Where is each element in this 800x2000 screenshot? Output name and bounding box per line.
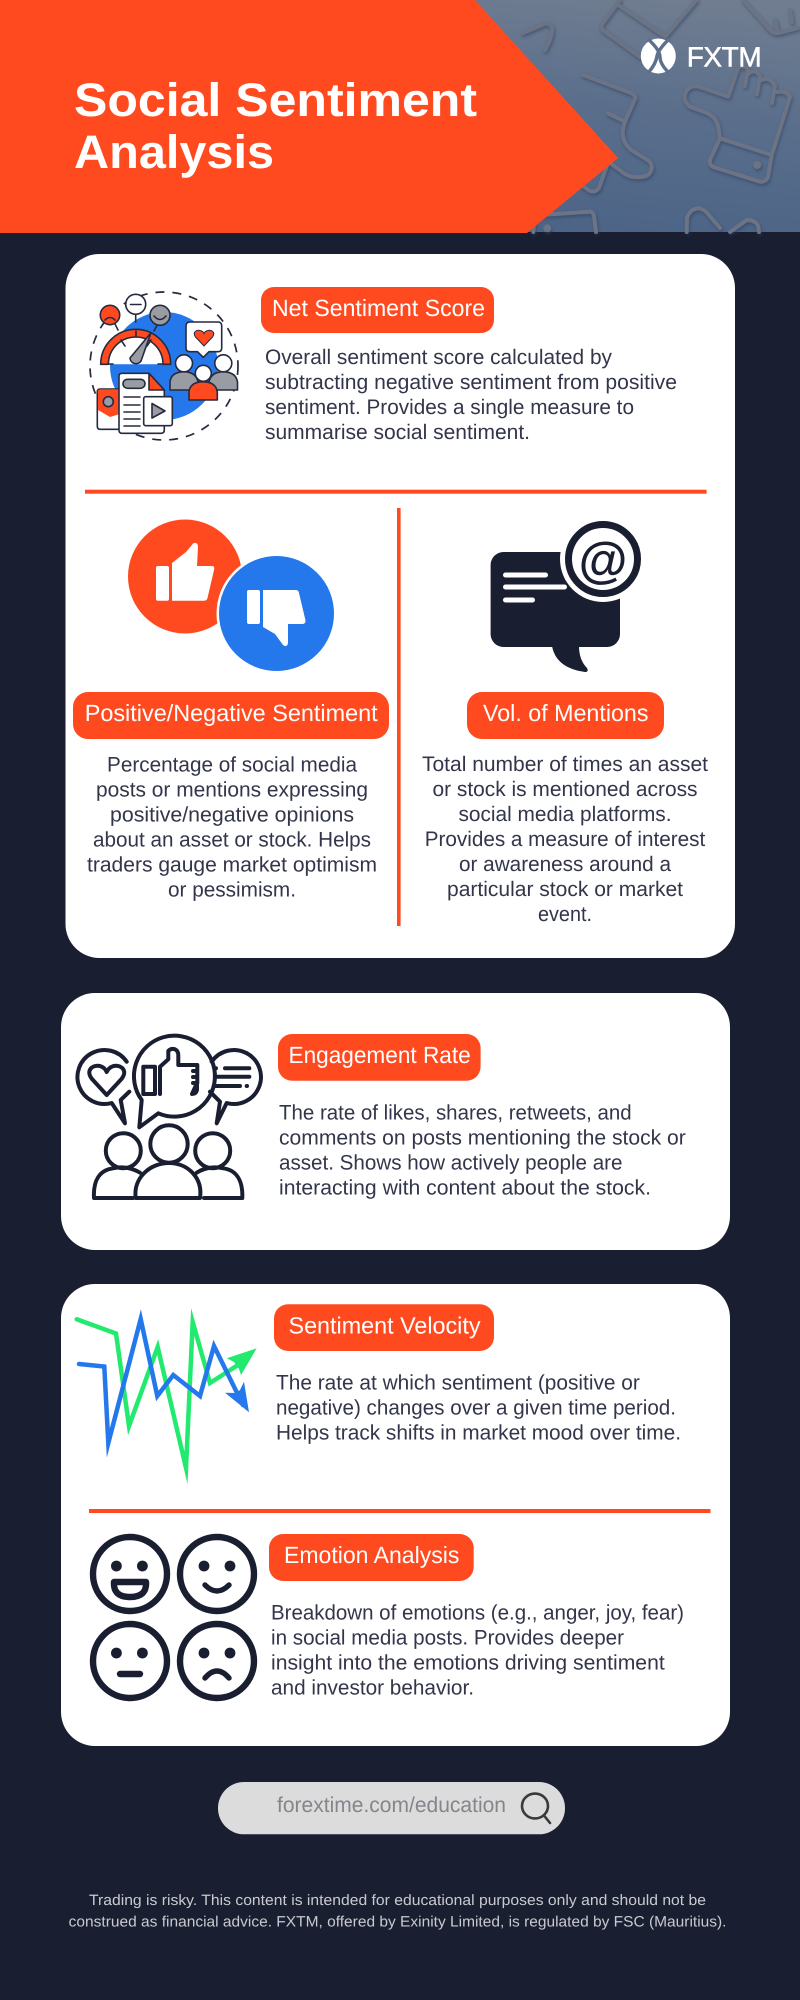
heading: net sentiment score bbox=[261, 287, 494, 333]
title bbox=[74, 73, 477, 178]
sad face bbox=[180, 1624, 254, 1698]
icon: people with speech bubbles bbox=[77, 1036, 261, 1198]
heading: positive/negative sentiment bbox=[73, 692, 389, 739]
text: mentions description: or stock is mentioned across bbox=[432, 778, 698, 801]
heading: engagement rate bbox=[278, 1034, 481, 1081]
text: positive/negative description bbox=[87, 754, 377, 902]
heading: sentiment velocity: Sentiment Velocity bbox=[288, 1312, 481, 1338]
panel: net sentiment, positive/negative, mentions bbox=[66, 254, 735, 958]
text: engagement description bbox=[279, 1101, 686, 1199]
text: net sentiment description: subtracting negative sentiment from positive bbox=[265, 371, 677, 394]
text: engagement description: interacting with content about the stock. bbox=[279, 1176, 651, 1199]
icon: emotion faces bbox=[93, 1537, 254, 1698]
text: mentions description: Total number of times an asset bbox=[422, 753, 708, 776]
neutral face bbox=[93, 1624, 167, 1698]
icon: sentiment gauge and people bbox=[90, 292, 238, 440]
text: emotion description: Breakdown of emotions (e.g., anger, joy, fear) bbox=[271, 1601, 684, 1624]
text: net sentiment description: sentiment. Provides a single measure to bbox=[265, 396, 634, 419]
text: emotion description: in social media posts. Provides deeper bbox=[271, 1626, 624, 1649]
search bar: forextime link: forextime.com/education bbox=[277, 1793, 506, 1817]
happy face bbox=[93, 1537, 167, 1611]
FXTM logo bbox=[641, 38, 762, 74]
icon: chat bubble with at sign: @ bbox=[579, 532, 627, 588]
text: velocity description: negative) changes over a given time period. bbox=[276, 1396, 676, 1419]
icon: chat bubble with at sign bbox=[491, 516, 646, 672]
panel: engagement rate bbox=[61, 993, 730, 1250]
header photo background with hand outlines bbox=[440, 0, 800, 232]
text: mentions description: social media platforms. bbox=[458, 803, 672, 826]
smiling face bbox=[180, 1537, 254, 1611]
text: emotion description: insight into the emotions driving sentiment bbox=[271, 1651, 665, 1674]
text: positive/negative description: Percentage of social media bbox=[107, 754, 357, 777]
disclaimer text: Trading is risky. This content is intended for educational purposes only and should not be bbox=[89, 1892, 706, 1909]
icon: velocity line chart bbox=[77, 1319, 257, 1468]
search bar: forextime link bbox=[218, 1782, 565, 1834]
heading: positive/negative sentiment: Positive/Negative Sentiment bbox=[85, 700, 378, 726]
disclaimer text: construed as financial advice. FXTM, offered by Exinity Limited, is regulated by FSC (Mauritius). bbox=[69, 1914, 726, 1931]
text: emotion description: and investor behavior. bbox=[271, 1676, 474, 1699]
text: velocity description bbox=[276, 1371, 681, 1444]
orange chevron bbox=[0, 0, 618, 233]
text: positive/negative description: traders gauge market optimism bbox=[87, 854, 377, 877]
text: mentions description: particular stock or market bbox=[447, 878, 683, 901]
text: positive/negative description: posts or mentions expressing bbox=[96, 779, 368, 802]
text: net sentiment description bbox=[265, 346, 677, 444]
icon: magnifying glass bbox=[522, 1794, 550, 1823]
disclaimer text bbox=[69, 1892, 726, 1931]
heading: net sentiment score: Net Sentiment Score bbox=[272, 295, 485, 321]
panel: sentiment velocity and emotion analysis bbox=[61, 1284, 730, 1746]
text: mentions description bbox=[422, 753, 708, 926]
text: velocity description: The rate at which sentiment (positive or bbox=[276, 1371, 640, 1394]
text: net sentiment description: summarise social sentiment. bbox=[265, 421, 530, 444]
text: positive/negative description: positive/negative opinions bbox=[110, 804, 354, 827]
green trend line bbox=[77, 1319, 257, 1468]
FXTM logo: FXTM bbox=[687, 42, 762, 72]
text: engagement description: The rate of likes, shares, retweets, and bbox=[279, 1101, 632, 1124]
heading: vol. of mentions: Vol. of Mentions bbox=[483, 700, 648, 726]
text: engagement description: asset. Shows how actively people are bbox=[279, 1151, 622, 1174]
blue trend line bbox=[79, 1319, 249, 1443]
heading: emotion analysis bbox=[269, 1534, 474, 1581]
text: velocity description: Helps track shifts in market mood over time. bbox=[276, 1421, 681, 1444]
title: Analysis bbox=[74, 125, 274, 178]
text: net sentiment description: Overall sentiment score calculated by bbox=[265, 346, 612, 369]
heading: sentiment velocity bbox=[274, 1304, 494, 1351]
icon: thumbs up and down bbox=[128, 520, 336, 674]
heading: engagement rate: Engagement Rate bbox=[288, 1042, 471, 1068]
text: positive/negative description: or pessimism. bbox=[168, 879, 296, 902]
text: mentions description: or awareness around a bbox=[459, 853, 671, 876]
text: engagement description: comments on posts mentioning the stock or bbox=[279, 1126, 686, 1149]
text: mentions description: Provides a measure of interest bbox=[425, 828, 705, 851]
text: positive/negative description: about an asset or stock. Helps bbox=[93, 829, 371, 852]
heading: emotion analysis: Emotion Analysis bbox=[284, 1542, 459, 1568]
title: Social Sentiment bbox=[74, 73, 477, 126]
text: emotion description bbox=[271, 1601, 684, 1699]
heading: vol. of mentions bbox=[467, 692, 664, 739]
text: mentions description: event. bbox=[538, 903, 592, 926]
header banner bbox=[0, 0, 800, 233]
